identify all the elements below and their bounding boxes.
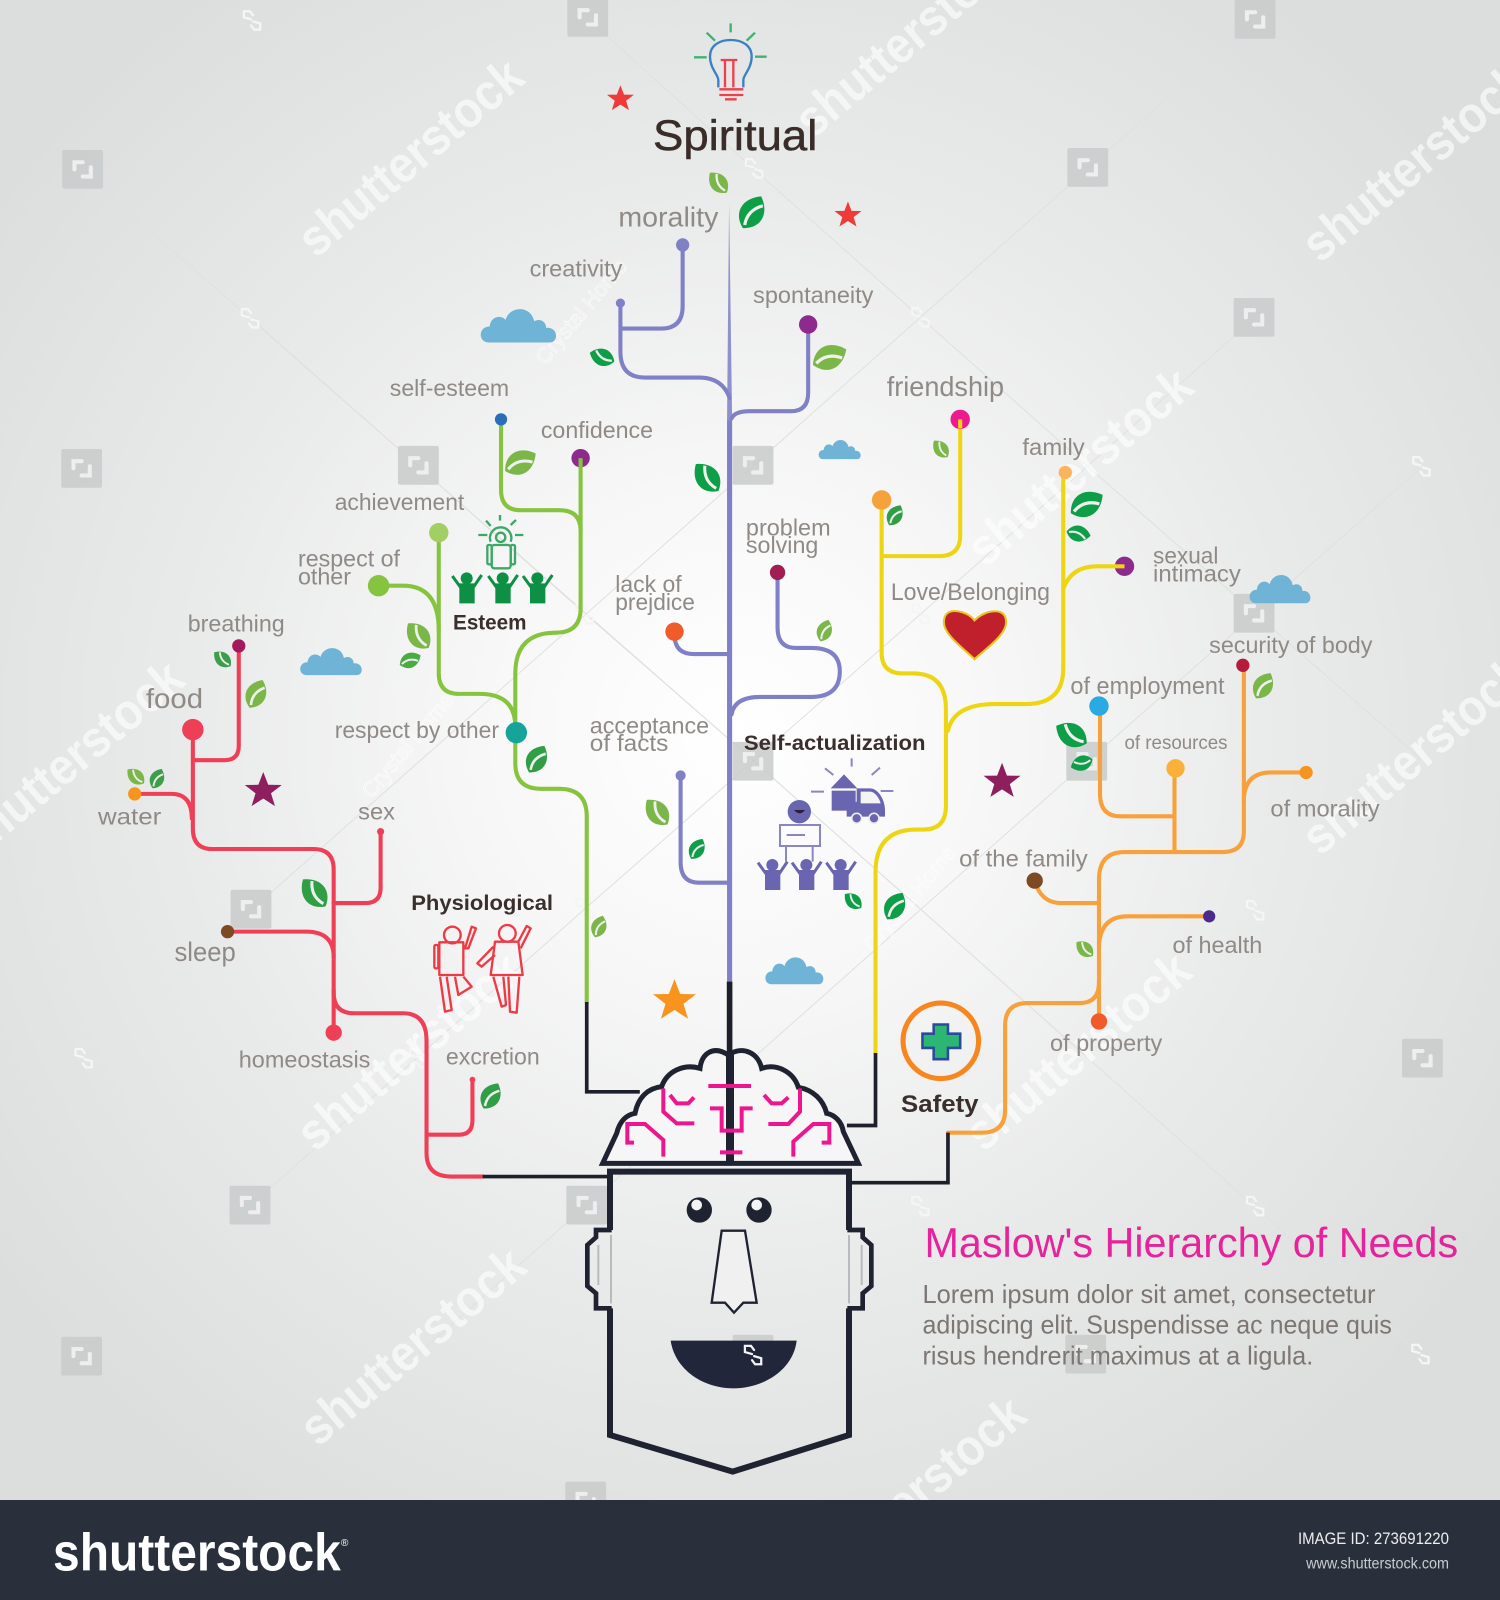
green labels: other <box>298 564 351 590</box>
heading: Spiritual: Spiritual <box>653 112 817 160</box>
green labels: respect of <box>298 545 400 571</box>
watermark pattern: shutterstock <box>288 1235 536 1456</box>
mouth <box>671 1341 797 1388</box>
watermark pattern: Crystal Home <box>859 841 961 956</box>
watermark pattern: shutterstock <box>956 355 1204 577</box>
heading: Self-actualization: Self-actualization <box>744 731 926 755</box>
heading: Esteem: Esteem <box>453 611 527 635</box>
tree: physiological (red) <box>97 611 553 1177</box>
yellow labels: Love/Belonging <box>891 579 1050 606</box>
purple labels: acceptance <box>590 713 709 739</box>
purple labels: problem <box>746 515 831 541</box>
black connectors <box>483 982 948 1183</box>
yellow branches <box>876 419 1124 1053</box>
watermark pattern: shutterstock <box>286 46 534 267</box>
green labels: respect by other <box>335 717 499 743</box>
tree: self-actualization (purple) <box>530 167 926 982</box>
yellow labels: family <box>1022 434 1085 460</box>
red labels: sex <box>358 798 395 824</box>
red nodes <box>128 639 475 1082</box>
orange leaves <box>1050 668 1279 961</box>
tree: safety (orange) <box>901 632 1380 1133</box>
purple labels: of facts <box>590 730 668 756</box>
icon: light bulb <box>694 23 767 99</box>
orange labels <box>959 632 1380 1056</box>
icon: safety plus <box>903 1003 979 1079</box>
orange labels: of health <box>1172 932 1262 958</box>
title: Maslow's Hierarchy of Needs <box>924 1219 1458 1266</box>
purple nodes <box>616 238 817 781</box>
footer bar <box>0 1500 1500 1600</box>
footer logo: shutterstock <box>53 1523 341 1582</box>
green leaves <box>397 444 610 940</box>
purple branches <box>620 204 840 982</box>
red labels: homeostasis <box>239 1046 370 1072</box>
purple labels <box>530 202 874 756</box>
orange labels: security of body <box>1209 632 1373 658</box>
yellow nodes <box>872 410 1134 576</box>
purple labels: spontaneity <box>753 282 874 308</box>
orange labels: of property <box>1050 1030 1163 1056</box>
tree: esteem (green) <box>298 375 653 1002</box>
orange labels: of morality <box>1270 795 1380 821</box>
red labels: food <box>146 683 203 714</box>
yellow labels: friendship <box>887 371 1004 402</box>
purple labels: solving <box>746 532 818 558</box>
tree: love and belonging (yellow) <box>872 371 1241 1053</box>
clouds <box>300 309 1310 984</box>
heading: Safety: Safety <box>901 1091 979 1118</box>
watermark pattern: shutterstock <box>285 940 533 1161</box>
nose <box>712 1231 757 1313</box>
purple labels: lack of <box>615 571 682 597</box>
ears <box>587 1230 871 1308</box>
red labels: water <box>97 803 161 829</box>
green branches <box>379 419 587 1002</box>
green labels <box>298 375 653 743</box>
yellow leaves <box>883 436 1109 544</box>
icon: self-actualization group <box>758 758 893 890</box>
orange labels: of resources <box>1124 732 1228 754</box>
yellow labels: intimacy <box>1153 561 1241 587</box>
body text: adipiscing elit. Suspendisse ac neque quis <box>922 1312 1392 1340</box>
face outline <box>610 1172 849 1472</box>
watermark pattern: shutterstock <box>788 1384 1036 1600</box>
icon: esteem group <box>452 515 552 603</box>
red labels: excretion <box>446 1043 540 1069</box>
red leaves <box>123 647 506 1113</box>
watermark over mouth <box>745 1346 761 1364</box>
orange nodes <box>1027 659 1313 1030</box>
registered mark: ® <box>341 1538 349 1549</box>
heading: Physiological: Physiological <box>411 891 553 915</box>
purple leaves <box>587 167 911 924</box>
orange branches <box>948 665 1306 1133</box>
body text <box>922 1281 1392 1370</box>
icon: heart <box>944 611 1006 659</box>
body text: risus hendrerit maximus at a ligula. <box>922 1342 1313 1370</box>
red branches <box>135 646 483 1177</box>
icon: head with brain <box>587 1051 871 1472</box>
green labels: confidence <box>541 417 653 443</box>
orange labels: of employment <box>1070 673 1225 700</box>
green nodes <box>368 413 590 743</box>
watermark pattern: Crystal Home <box>357 688 459 803</box>
site url: www.shutterstock.com <box>1305 1555 1449 1572</box>
yellow labels <box>887 371 1241 606</box>
red labels <box>97 611 540 1072</box>
purple labels: creativity <box>530 256 623 282</box>
orange labels: of the family <box>959 845 1088 871</box>
eyes <box>687 1197 772 1223</box>
body text: Lorem ipsum dolor sit amet, consectetur <box>922 1281 1376 1309</box>
icon: physiological couple <box>434 925 531 1013</box>
green labels: achievement <box>335 489 465 515</box>
yellow labels: sexual <box>1153 542 1218 568</box>
stars <box>245 85 1021 1019</box>
purple labels: prejdice <box>615 589 695 615</box>
red labels: breathing <box>188 611 285 637</box>
red labels: sleep <box>174 937 236 967</box>
watermark pattern: shutterstock <box>954 940 1202 1161</box>
watermark pattern: Crystal Home <box>531 254 632 369</box>
brain <box>603 1051 858 1163</box>
purple labels: morality <box>618 202 719 233</box>
image id: IMAGE ID: 273691220 <box>1298 1530 1449 1548</box>
green labels: self-esteem <box>390 375 509 401</box>
